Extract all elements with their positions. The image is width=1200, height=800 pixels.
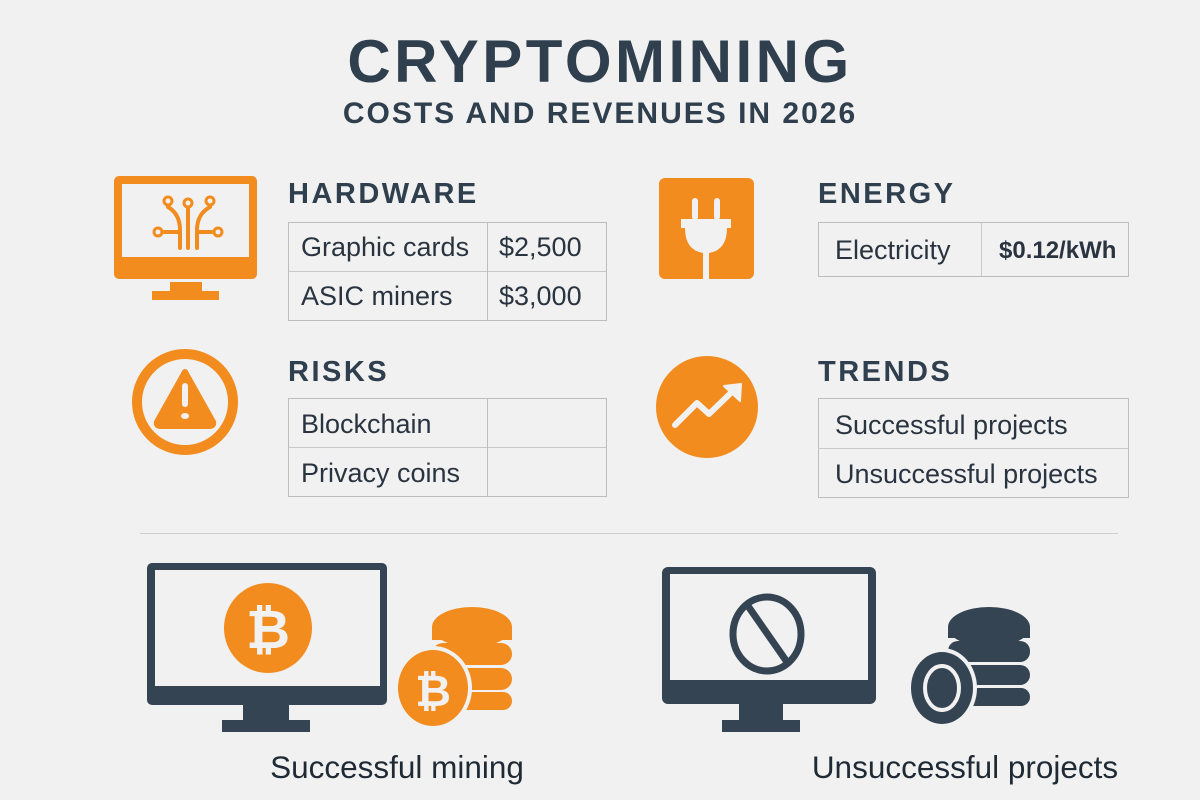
table: risks — [288, 398, 606, 496]
icon: orange coin stack: ₿ — [415, 667, 451, 716]
label: unsuccessful projects: Unsuccessful projects — [812, 749, 1118, 785]
label: successful mining: Successful mining — [270, 749, 524, 785]
title: CRYPTOMINING — [347, 28, 853, 95]
icon: hardware monitor — [114, 176, 257, 300]
table: hardware: $3,000 — [499, 281, 582, 311]
table: energy — [818, 222, 1128, 276]
table: hardware: ASIC miners — [301, 281, 453, 311]
icon: successful mining monitor — [147, 563, 387, 732]
icon: trends — [656, 356, 758, 458]
subtitle: COSTS AND REVENUES IN 2026 — [343, 97, 857, 130]
table: trends: Successful projects — [835, 410, 1068, 440]
table: risks: Privacy coins — [301, 458, 460, 488]
icon: orange coin stack — [394, 607, 512, 730]
table: energy: $0.12/kWh — [999, 237, 1116, 264]
table: hardware — [288, 222, 606, 320]
icon: risks warning — [137, 354, 233, 450]
heading: risks: RISKS — [288, 356, 389, 388]
table: hardware: Graphic cards — [301, 232, 469, 262]
heading: energy: ENERGY — [818, 178, 955, 210]
table: trends — [818, 398, 1128, 498]
table: trends: Unsuccessful projects — [835, 459, 1098, 489]
icon: unsuccessful monitor — [662, 567, 876, 732]
title — [343, 28, 857, 130]
table: hardware: $2,500 — [499, 232, 582, 262]
icon: energy plug — [659, 178, 754, 279]
icon: successful mining monitor: ₿ — [246, 600, 290, 660]
table: energy: Electricity — [835, 235, 951, 265]
icon: dark coin stack — [907, 607, 1030, 728]
heading: trends: TRENDS — [818, 356, 952, 388]
heading: hardware: HARDWARE — [288, 178, 479, 210]
table: risks: Blockchain — [301, 409, 432, 439]
